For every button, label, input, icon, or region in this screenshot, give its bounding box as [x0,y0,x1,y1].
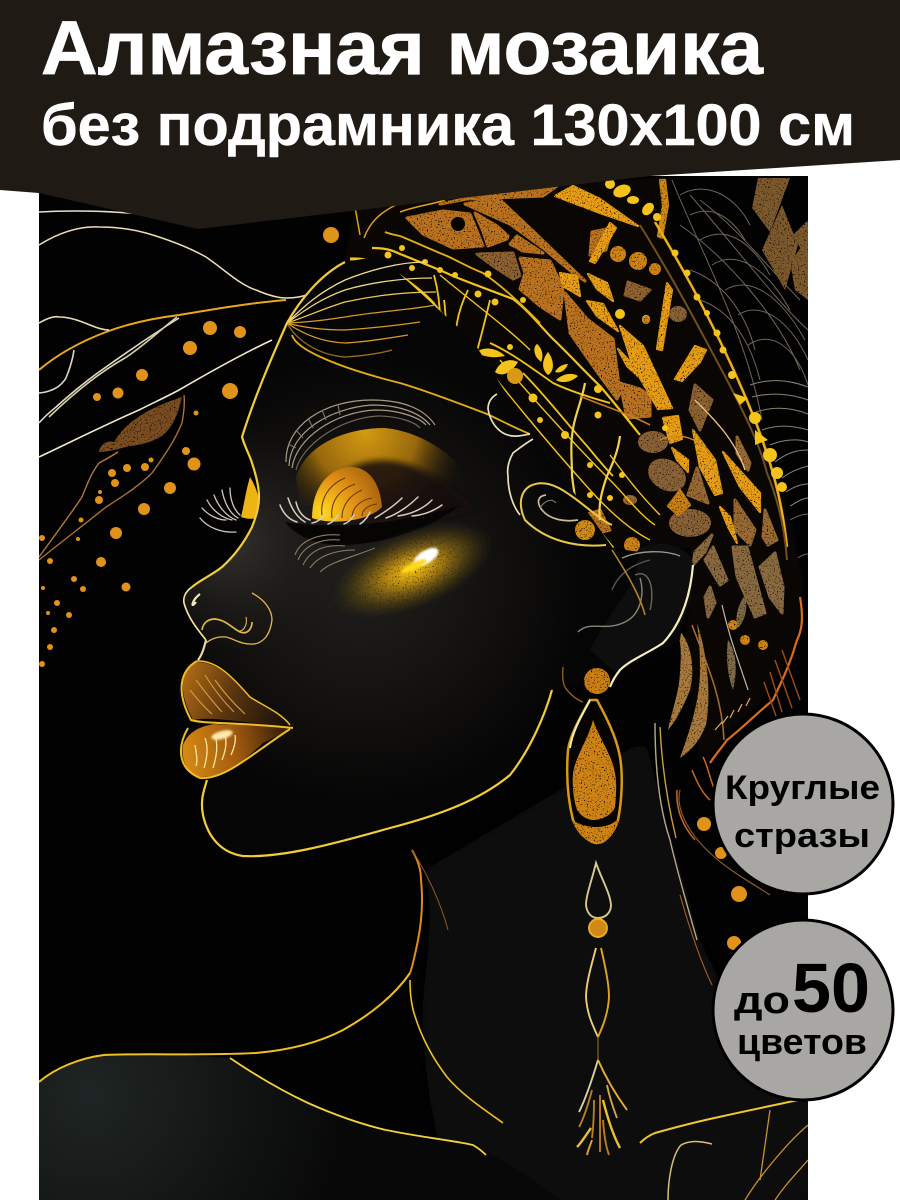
badge: round rhinestones: Круглые [725,769,880,807]
corner brown patches [752,178,808,300]
earring [567,668,627,1155]
neck and shoulder gold lines [39,723,808,1200]
eyebrow [286,400,435,470]
feather background upper right [672,180,808,560]
turban: gold strands on front band [350,200,745,548]
badge: round rhinestones [713,714,893,894]
lips [181,661,293,778]
turban: gold beads and leaves [384,179,787,501]
eyeshadow [296,428,454,522]
eyelashes [280,497,442,524]
artwork: portrait panel [39,176,808,1200]
turban: back dark band lines [640,222,802,840]
neck fill [423,740,808,1200]
earring tassel [577,1060,627,1155]
title: Алмазная мозаика [41,6,764,91]
gold floating dots [39,227,747,950]
badge: up to 50 colours: цветов [737,1021,867,1062]
face gold outline [192,262,552,856]
left decorative gold lines [39,210,306,560]
turban: lower speckled strands [668,628,692,730]
temple spiral curls [488,394,612,546]
turban: dark base [794,557,798,560]
nose details [184,587,272,644]
face silhouette [184,258,682,774]
turban: black eye dot [451,217,465,231]
badge: up to 50 colours: 50 [792,949,870,1027]
earring stud [584,668,610,694]
lash shadow line [285,505,460,545]
earring teardrop pendant [567,700,622,843]
banner [0,0,900,229]
badge: up to 50 colours [713,920,893,1100]
badge: round rhinestones: стразы [734,817,870,855]
turban: bright gold panels [555,180,760,543]
badge: up to 50 colours: до [734,980,790,1022]
left speckled leaf [99,397,182,452]
eyelid [312,467,382,522]
under-eye lines [295,535,375,572]
turban: speckled bronze panels [407,186,783,758]
subtitle: без подрамника 130х100 см [41,93,855,158]
forehead fan lines [287,262,436,357]
turban: orange beads [610,246,768,650]
gold curl bead [575,520,595,540]
ear [563,544,693,702]
temple line [292,335,530,434]
cheek glow [336,525,487,615]
shoulder fill [39,1055,330,1200]
far eye [200,477,259,532]
earring lower drops [586,863,611,1062]
